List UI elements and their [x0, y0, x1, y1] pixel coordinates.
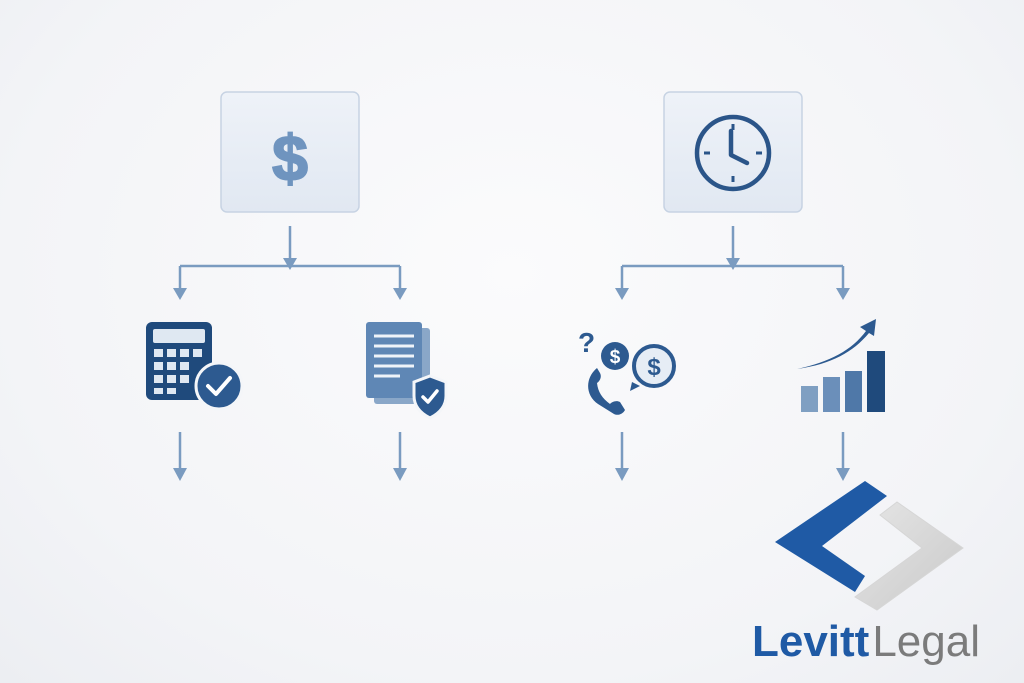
logo: Levitt Legal mark — [775, 481, 963, 610]
icon: phone with dollar bubbles: $ — [647, 354, 661, 381]
box: dollar: $ — [272, 122, 308, 194]
arrows: right tree — [622, 226, 843, 472]
icon: phone with dollar bubbles: $ — [610, 347, 621, 368]
logo text: LevittLegal — [752, 617, 980, 666]
icon: documents shield — [366, 322, 446, 418]
arrows: left tree — [180, 226, 400, 472]
icon: phone with dollar bubbles: ? — [578, 327, 595, 358]
arrowheads: left tree — [173, 258, 407, 481]
icon: phone with dollar bubbles — [578, 327, 674, 415]
box: clock — [664, 92, 802, 212]
icon: growth bar chart — [797, 319, 885, 412]
arrowheads: right tree — [615, 258, 850, 481]
box: dollar — [221, 92, 359, 212]
icon: calculator check — [146, 322, 242, 409]
